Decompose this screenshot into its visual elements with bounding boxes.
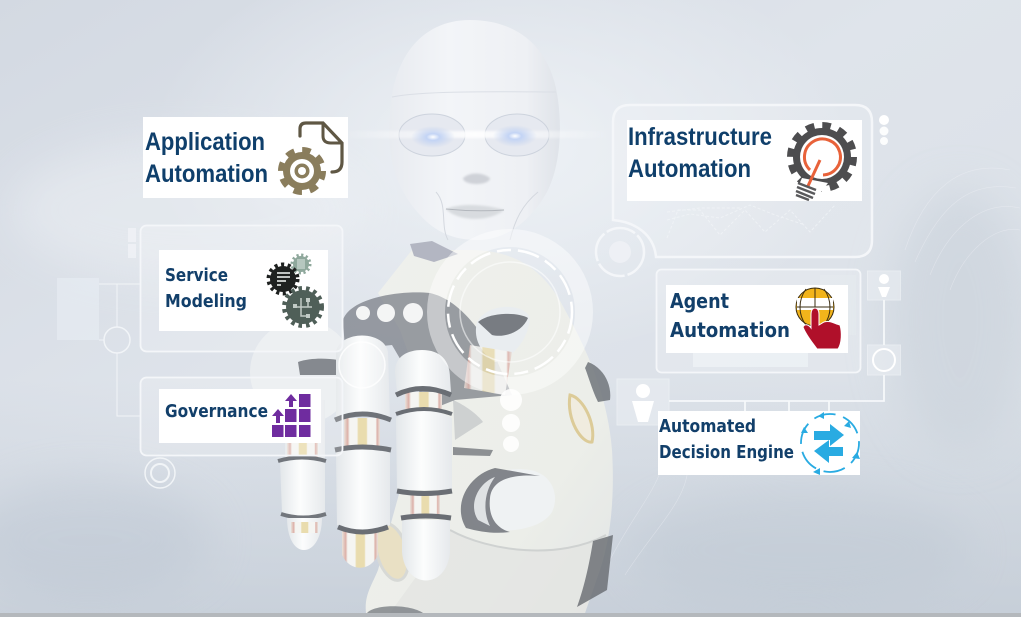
heading: Automated Decision Engine: Automated: [659, 416, 756, 437]
icon: growth blocks: [272, 394, 310, 437]
card: Service Modeling: [159, 250, 328, 331]
HUD target circle: [436, 238, 584, 386]
card: Infrastructure Automation: [627, 120, 862, 201]
robot torso: [366, 250, 613, 613]
heading: Agent Automation: Automation: [670, 318, 790, 342]
heading: Application Automation: Application: [145, 128, 265, 156]
robot finger: far left: [278, 400, 326, 550]
robot nose and mouth: [446, 174, 504, 219]
robot mid-body shading: [453, 400, 493, 456]
icon: three gears: [269, 255, 322, 326]
icon: document with gear: [281, 123, 342, 192]
icon: gear with light bulb: [790, 126, 854, 200]
heading: Agent Automation: Agent: [670, 289, 729, 313]
HUD small ring on finger: [339, 342, 385, 388]
robot head: [389, 20, 560, 240]
heading: Infrastructure Automation: Automation: [628, 155, 751, 183]
HUD dots on hand: [356, 303, 522, 452]
heading: Automated Decision Engine: [659, 416, 794, 463]
heading: Service Modeling: Modeling: [165, 291, 247, 312]
card: Governance: [159, 389, 321, 443]
card: Automated Decision Engine: [658, 411, 860, 475]
robot finger: third: [395, 350, 452, 580]
robot palm socket: [370, 520, 414, 584]
heading: Service Modeling: Service: [165, 265, 228, 286]
heading: Service Modeling: [165, 265, 247, 312]
robot palm and wrist: [250, 292, 512, 424]
heading: Automated Decision Engine: Decision Engine: [659, 442, 794, 463]
robot illustration: [250, 20, 613, 613]
heading: Infrastructure Automation: Infrastructure: [628, 123, 772, 151]
icon: circular exchange arrows: [801, 412, 860, 475]
heading: Agent Automation: [670, 289, 790, 342]
icon: globe with pointing hand: [796, 288, 841, 349]
robot finger: second: [335, 336, 391, 568]
heading: Application Automation: Automation: [145, 160, 268, 188]
right HUD panels: [596, 105, 900, 425]
card: Application Automation: [143, 117, 348, 198]
robot neck and collar: [410, 241, 458, 262]
heading: Application Automation: [145, 128, 268, 188]
heading: Infrastructure Automation: [628, 123, 772, 183]
robot eyes: [340, 114, 610, 156]
robot thumb: [461, 468, 555, 533]
left HUD panels: [57, 226, 342, 488]
card: Agent Automation: [666, 285, 848, 353]
raised pointing finger: [464, 307, 530, 395]
heading: Governance: Governance: [165, 401, 268, 422]
